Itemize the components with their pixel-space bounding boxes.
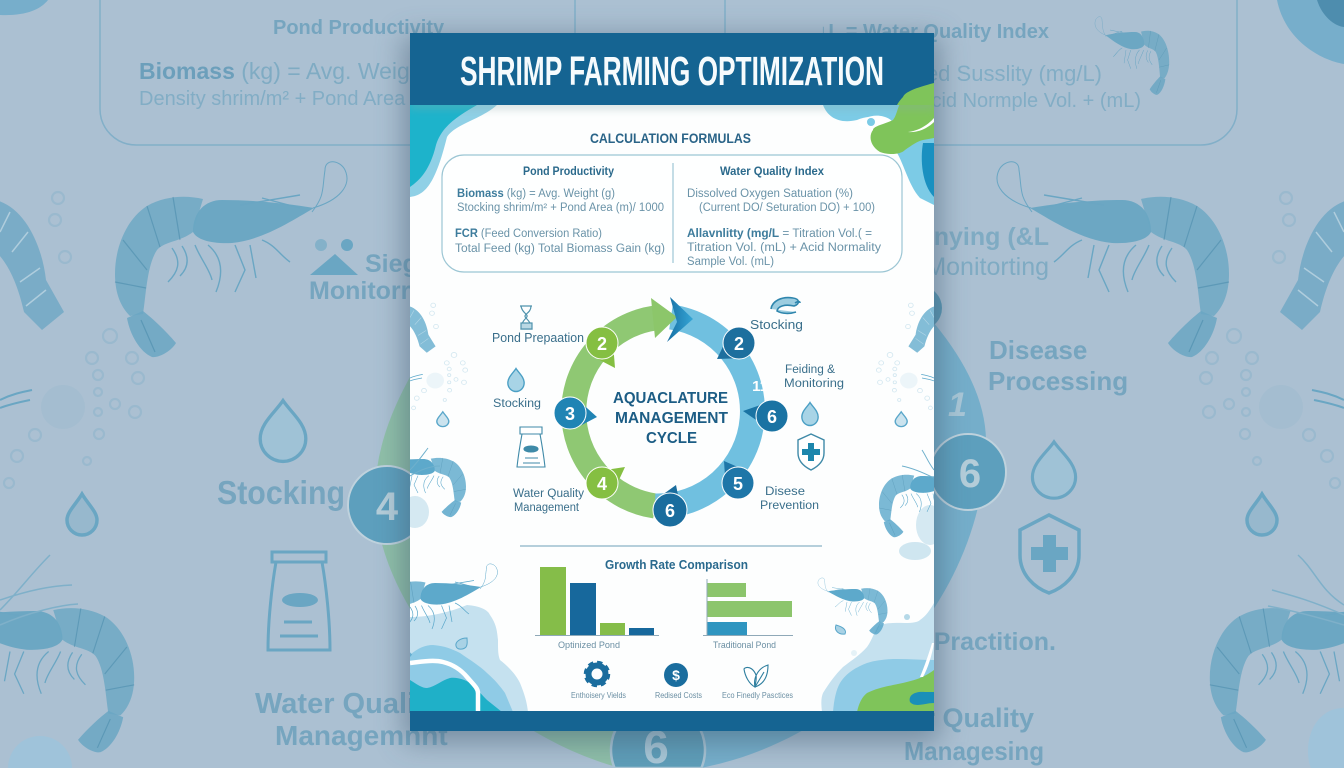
poster <box>410 33 934 731</box>
background: formula box <box>100 0 1237 145</box>
background: formula box: Biomass (kg) = Avg. Weight <box>139 58 430 84</box>
formula column: water quality index: Dissolved Oxygen Satuation (%) <box>687 188 853 200</box>
formula column: water quality index <box>687 166 881 268</box>
re-drawn leaf over header <box>897 83 934 105</box>
benefit: eco practices: Eco Finedly Pasctices <box>722 691 793 700</box>
background: formula box: Density shrim/m² + Pond Area <box>139 88 406 110</box>
badge 2 green: 2 <box>597 334 607 354</box>
background: blurred labels <box>217 223 1128 766</box>
benefit: costs <box>655 663 702 700</box>
poster shadow <box>404 36 940 742</box>
formula column: pond productivity: Biomass (kg) = Avg. Weight (g) <box>457 188 615 200</box>
background: blurred labels: Disease <box>989 335 1087 365</box>
badge 4 <box>586 467 625 499</box>
badge 2 green <box>586 327 618 368</box>
badge 3 <box>554 397 597 429</box>
heading: growth rate: Growth Rate Comparison <box>605 558 748 572</box>
chart: optimized pond: Optinized Pond <box>558 640 620 651</box>
stage labels: Stocking <box>493 398 541 410</box>
benefit: yields: Enthoisery Vields <box>571 691 626 700</box>
decoration: top-left wave <box>410 105 497 197</box>
center title: AQUACLATURE <box>613 390 728 407</box>
formula column: pond productivity: FCR (Feed Conversion Ratio) <box>455 228 602 240</box>
icon: feed bag <box>517 427 545 467</box>
background: formula box: Pond Productivity <box>273 17 445 39</box>
center title <box>613 392 728 443</box>
badge 6 bottom: 6 <box>665 501 675 521</box>
stage labels: Feiding & <box>785 364 835 376</box>
background: blurred labels: Stocking <box>217 474 345 511</box>
ring: green half <box>574 318 655 506</box>
formula column: water quality index: Allavnlitty (mg/L = Titration Vol.( = <box>687 228 872 240</box>
icon: shield <box>798 434 824 470</box>
background: formula box: ↓L = Water Quality Index <box>818 21 1049 43</box>
chart: traditional pond <box>703 579 793 651</box>
chart: traditional pond: Traditional Pond <box>713 640 776 651</box>
stage labels: Monitoring <box>784 378 844 390</box>
chart: management cycle <box>492 297 844 527</box>
stage labels: Prevention <box>760 500 819 512</box>
badge 5: 5 <box>733 474 743 494</box>
icon: water drop left <box>508 368 524 392</box>
background: blurred labels: Managesing <box>904 736 1044 766</box>
title: SHRIMP FARMING OPTIMIZATION <box>460 48 884 94</box>
decoration: bottom-left waves <box>410 605 528 712</box>
background: enlarged cycle ring: 6 <box>959 452 981 496</box>
background: blurred labels: Managemnnt <box>275 720 448 751</box>
background: blurred labels: Monitorring <box>309 277 448 305</box>
arrow: green head <box>651 298 677 338</box>
icon: hourglass <box>520 306 532 329</box>
decoration: bottom-right waves <box>401 496 944 712</box>
arrow: blue chevron <box>667 297 693 342</box>
decoration: top-right wave and leaf <box>823 105 934 205</box>
stage labels: Stocking <box>750 318 803 332</box>
badge 5 <box>722 461 754 499</box>
background: blurred labels: Processing <box>988 366 1128 396</box>
stage labels: Water Quality <box>513 488 584 500</box>
badge 6 right <box>743 400 788 432</box>
formula column: water quality index: Titration Vol. (mL) + Acid Normality <box>687 242 881 254</box>
formula column: pond productivity <box>455 166 665 255</box>
badge 2 blue <box>717 327 755 359</box>
background: blurred labels: Snying (&L <box>917 223 1049 251</box>
icon: shrimp <box>771 298 800 313</box>
background: blurred labels: Monitorting <box>925 253 1049 281</box>
ring mark: 11 <box>752 378 768 395</box>
badge 4: 4 <box>597 474 607 494</box>
center title: MANAGEMENT <box>615 410 729 427</box>
heading: calculation formulas: CALCULATION FORMULAS <box>590 131 751 146</box>
formula column: water quality index: (Current DO/ Seturation DO) + 100) <box>699 202 875 214</box>
benefit: yields <box>571 663 626 700</box>
benefit: costs: $ <box>672 667 680 683</box>
badge 6 bottom <box>653 485 687 527</box>
badge 3: 3 <box>565 404 575 424</box>
stage labels: Management <box>514 502 580 514</box>
background: blurred labels: Water Quality <box>861 703 1034 733</box>
background: formula box: Acid Normple Vol. + (mL) <box>918 90 1141 112</box>
chart: optimized pond <box>535 567 659 651</box>
panel: formulas <box>442 155 902 272</box>
formula column: water quality index: Sample Vol. (mL) <box>687 256 774 268</box>
background: blurred labels: & Practition. <box>909 628 1056 656</box>
center title: CYCLE <box>646 430 697 447</box>
formula column: pond productivity: Stocking shrim/m² + Pond Area (m)/ 1000 <box>457 202 664 214</box>
background: enlarged cycle ring: 1 <box>948 386 967 424</box>
background: blurred labels: Siege <box>365 250 432 278</box>
stage labels: Disese <box>765 486 805 498</box>
stage labels: Pond Prepaation <box>492 331 584 345</box>
icon: water drop right <box>802 402 818 426</box>
benefit: eco practices <box>722 665 793 700</box>
stage labels <box>492 318 844 514</box>
background: water drops <box>260 401 1076 498</box>
background: shield icon <box>1020 515 1079 593</box>
formula column: water quality index: Water Quality Index <box>720 166 825 178</box>
footer band <box>410 711 934 731</box>
poster shrimp and bubbles <box>373 303 972 662</box>
formula column: pond productivity: Pond Productivity <box>523 166 615 178</box>
background: feed bag icon <box>268 552 330 650</box>
badge 2 blue: 2 <box>734 334 744 354</box>
badge 6 right: 6 <box>767 407 777 427</box>
background: monitoring icon <box>310 239 358 275</box>
benefit: costs: Redised Costs <box>655 691 702 700</box>
ring: blue half <box>655 317 752 506</box>
header band <box>410 33 934 110</box>
formula column: pond productivity: Total Feed (kg) Total Biomass Gain (kg) <box>455 243 665 255</box>
background: enlarged cycle ring: 4 <box>376 485 399 529</box>
background: formula box: Dissolved Susslity (mg/L) <box>855 61 1102 86</box>
background: blurred labels: Water Quality <box>255 688 441 720</box>
divider line <box>520 545 822 547</box>
background: enlarged cycle ring <box>348 286 1006 768</box>
